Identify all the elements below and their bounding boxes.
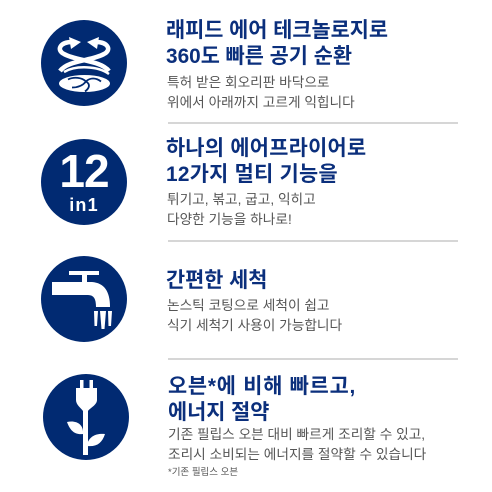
heading: rapid air: 래피드 에어 테크놀로지로 [166, 19, 388, 42]
text: 12 functions description [167, 192, 316, 227]
heading: 12 functions: 12가지 멀티 기능을 [166, 163, 338, 186]
text: rapid air description [167, 75, 355, 110]
text: 12 functions description: 튀기고, 볶고, 굽고, 익히고 [167, 192, 316, 207]
heading: rapid air: 360도 빠른 공기 순환 [166, 45, 352, 68]
icon: 12 in 1 circle: 12 [59, 145, 109, 197]
icon: air swirl circle [41, 20, 127, 106]
heading: 12 functions: 하나의 에어프라이어로 [166, 137, 366, 160]
text: rapid air description: 위에서 아래까지 고르게 익힙니다 [167, 95, 355, 110]
icon: 12 in 1 circle [41, 139, 127, 225]
heading: energy saving: 오븐*에 비해 빠르고, [168, 375, 356, 398]
text: energy description: 기존 필립스 오븐 대비 빠르게 조리할 수 있고, [168, 427, 425, 442]
footnote: *기존 필립스 오븐 [168, 467, 238, 478]
heading: rapid air [166, 19, 388, 68]
icon: 12 in 1 circle: in1 [69, 195, 99, 215]
text: energy description [168, 427, 426, 462]
text: cleaning description [167, 298, 342, 333]
heading: easy cleaning: 간편한 세척 [166, 269, 267, 292]
text: cleaning description: 식기 세척기 사용이 가능합니다 [167, 318, 342, 333]
heading: 12 functions [166, 137, 366, 186]
heading: energy saving: 에너지 절약 [168, 401, 269, 424]
text: rapid air description: 특허 받은 회오리판 바닥으로 [167, 75, 330, 90]
text: cleaning description: 논스틱 코팅으로 세척이 쉽고 [167, 298, 330, 313]
heading: energy saving [168, 375, 356, 424]
text: 12 functions description: 다양한 기능을 하나로! [167, 212, 292, 227]
text: energy description: 조리시 소비되는 에너지를 절약할 수 있습니다 [168, 447, 426, 462]
